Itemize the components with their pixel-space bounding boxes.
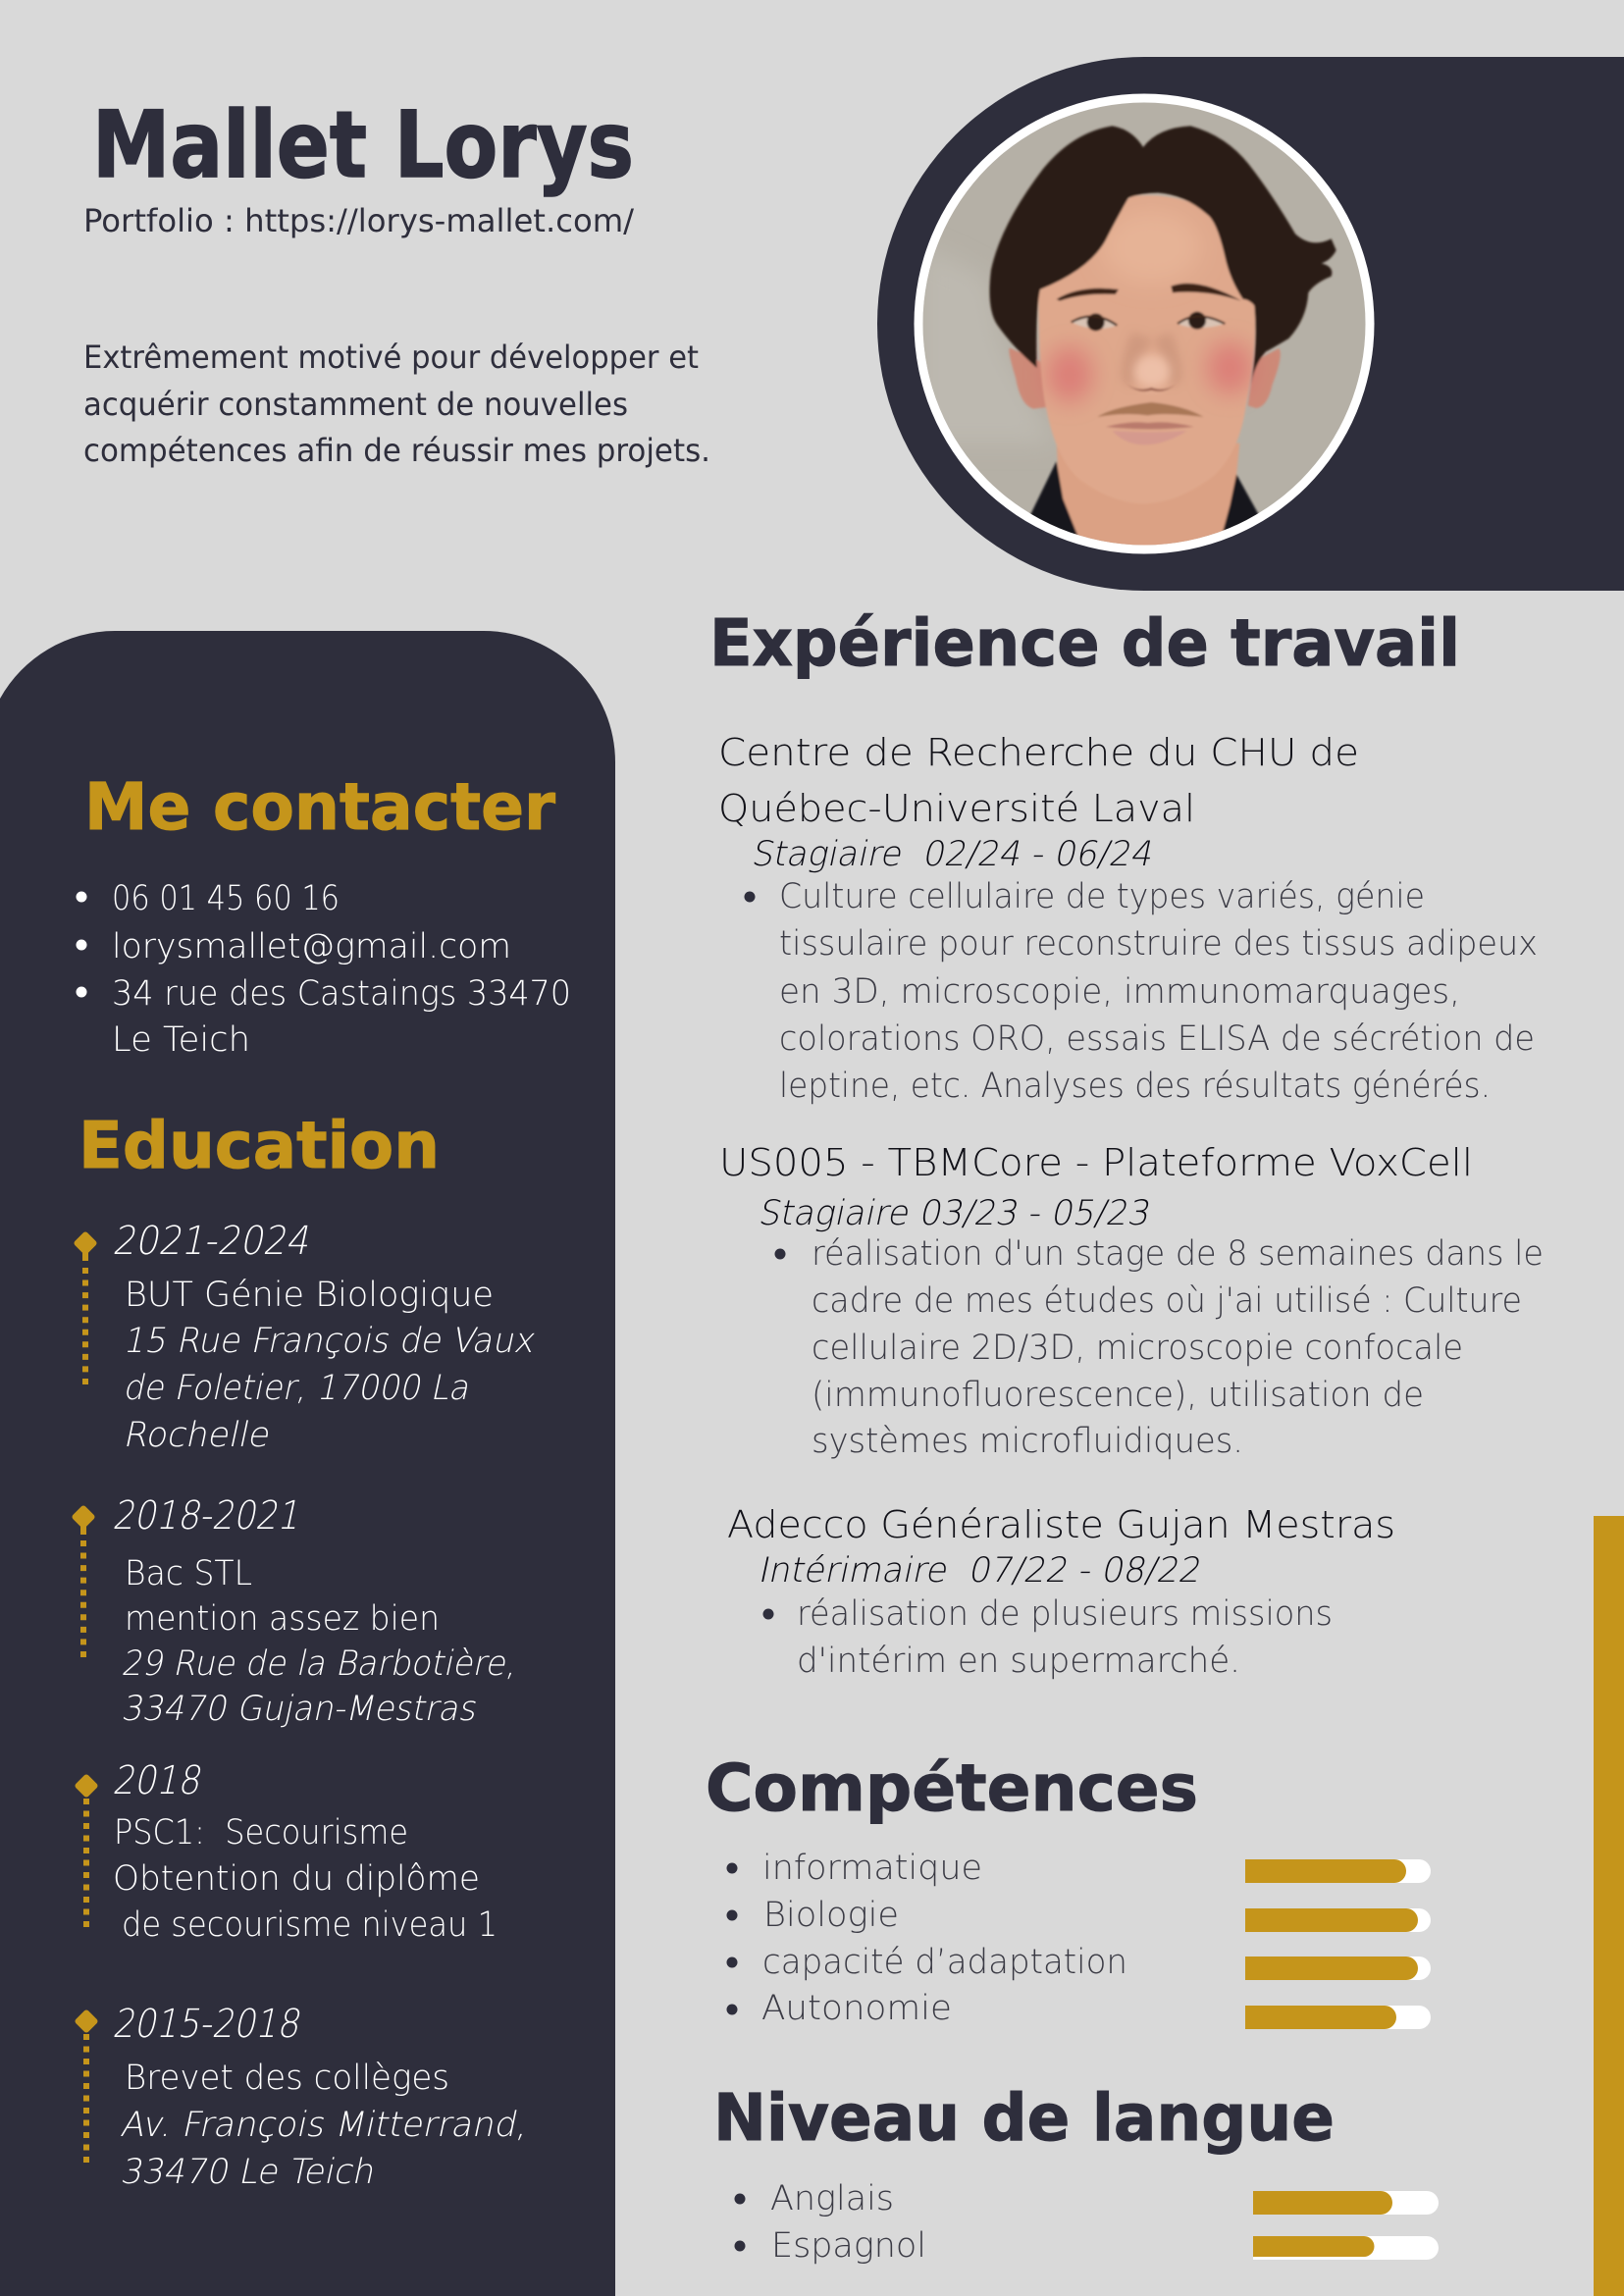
education entry 2015-2018: Brevet des collèges (125, 2059, 449, 2098)
language bars (1253, 2191, 1439, 2260)
contact list: Le Teich (112, 1020, 250, 1060)
job: Adecco: Adecco Généraliste Gujan Mestras (727, 1503, 1395, 1546)
heading: contact: Me contacter (84, 769, 555, 845)
intro text (83, 339, 710, 469)
job: CHU de Québec: colorations ORO, essais ELISA de sécrétion de (779, 1019, 1535, 1059)
job: TBMCore: systèmes microfluidiques. (812, 1422, 1243, 1461)
job: CHU de Québec: en 3D, microscopie, immunomarquages, (779, 972, 1460, 1012)
education entry 2015-2018: Av. François Mitterrand, (118, 2105, 533, 2145)
education entry 2015-2018 (74, 2000, 533, 2192)
job: Adecco: Intérimaire 07/22 - 08/22 (756, 1550, 1206, 1591)
contact list: lorysmallet@gmail.com (112, 927, 511, 966)
education entry 2015-2018: 33470 Le Teich (118, 2152, 380, 2192)
skill bars (1245, 1859, 1431, 2029)
job: CHU de Québec: Culture cellulaire de types variés, génie (779, 877, 1425, 916)
job: TBMCore (719, 1141, 1544, 1461)
education entry 2021-2024: 2021-2024 (110, 1217, 316, 1264)
education entry 2018-2021: 29 Rue de la Barbotière, (119, 1644, 522, 1684)
languages list: Espagnol (771, 2226, 926, 2266)
education entry 2018: de secourisme niveau 1 (122, 1905, 498, 1945)
title: Mallet Lorys (92, 92, 634, 199)
skills list: capacité d’adaptation (762, 1943, 1127, 1982)
photo portrait (913, 93, 1374, 554)
panel: sidebar (0, 631, 615, 2296)
job: CHU de Québec (718, 731, 1538, 1106)
education entry 2018: 2018 (110, 1756, 207, 1803)
languages list (734, 2179, 926, 2266)
portfolio link: Portfolio : https://lorys-mallet.com/ (83, 202, 634, 239)
panel: header band (877, 57, 1624, 591)
skills list: informatique (762, 1849, 982, 1888)
job: TBMCore: US005 - TBMCore - Plateforme VoxCell (719, 1141, 1473, 1184)
heading: languages: Niveau de langue (713, 2080, 1335, 2156)
job: TBMCore: Stagiaire 03/23 - 05/23 (756, 1193, 1155, 1233)
job: Adecco: d'intérim en supermarché. (797, 1642, 1240, 1681)
education entry 2018: PSC1: Secourisme (114, 1813, 408, 1852)
education entry 2021-2024: BUT Génie Biologique (125, 1276, 494, 1315)
job: CHU de Québec: Stagiaire 02/24 - 06/24 (749, 834, 1158, 874)
education entry 2018-2021: 2018-2021 (110, 1491, 306, 1539)
education entry 2021-2024 (73, 1217, 540, 1455)
education entry 2018 (74, 1756, 498, 1945)
intro text: compétences afin de réussir mes projets. (83, 432, 710, 469)
education entry 2021-2024: Rochelle (121, 1415, 275, 1455)
skills list: Biologie (763, 1896, 899, 1935)
contact list: 06 01 45 60 16 (112, 879, 340, 918)
job: TBMCore: réalisation d'un stage de 8 semaines dans le (812, 1234, 1544, 1274)
job: Adecco (727, 1503, 1395, 1681)
intro text: acquérir constamment de nouvelles (83, 386, 628, 423)
education entry 2015-2018: 2015-2018 (110, 2000, 306, 2047)
job: TBMCore: cellulaire 2D/3D, microscopie confocale (812, 1329, 1463, 1368)
heading: education: Education (79, 1108, 440, 1183)
job: CHU de Québec: tissulaire pour reconstruire des tissus adipeux (779, 924, 1538, 964)
languages list: Anglais (770, 2179, 894, 2218)
job: TBMCore: cadre de mes études où j'ai utilisé : Culture (812, 1281, 1522, 1321)
education entry 2018-2021: mention assez bien (125, 1599, 440, 1639)
job: CHU de Québec: Québec-Université Laval (718, 787, 1195, 830)
education entry 2018-2021: 33470 Gujan-Mestras (119, 1689, 482, 1729)
education entry 2018-2021: Bac STL (125, 1554, 252, 1593)
education entry 2018-2021 (71, 1491, 522, 1729)
job: CHU de Québec: Centre de Recherche du CHU de (718, 731, 1359, 774)
accent strip (1594, 1516, 1624, 2296)
job: Adecco: réalisation de plusieurs missions (797, 1594, 1333, 1634)
education entry 2021-2024: de Foletier, 17000 La (121, 1368, 475, 1408)
contact list: 34 rue des Castaings 33470 (112, 974, 571, 1014)
heading: work experience: Expérience de travail (709, 605, 1460, 681)
heading: skills: Compétences (706, 1750, 1198, 1826)
education entry 2018: Obtention du diplôme (113, 1859, 480, 1899)
job: TBMCore: (immunofluorescence), utilisation de (812, 1376, 1424, 1415)
skills list (726, 1849, 1127, 2028)
intro text: Extrêmement motivé pour développer et (83, 339, 699, 376)
job: CHU de Québec: leptine, etc. Analyses des résultats générés. (779, 1067, 1491, 1106)
skills list: Autonomie (761, 1989, 952, 2028)
education entry 2021-2024: 15 Rue François de Vaux (121, 1321, 540, 1361)
contact list (77, 879, 571, 1060)
